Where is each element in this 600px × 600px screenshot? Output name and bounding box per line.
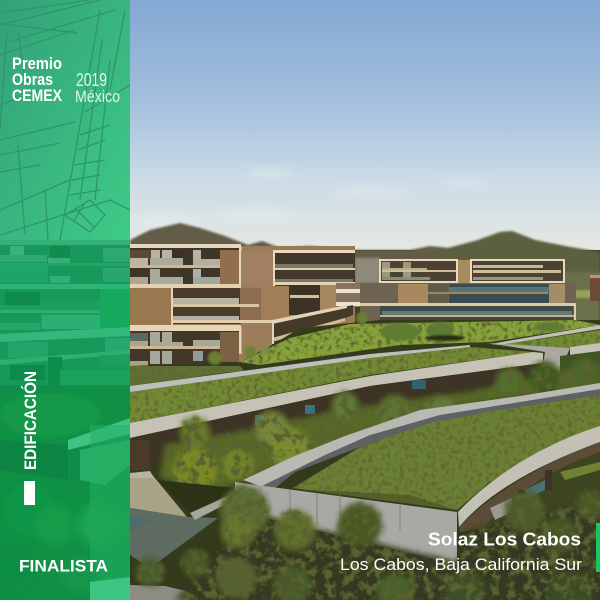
mountains: [130, 223, 600, 290]
project name: Solaz Los Cabos: [428, 530, 581, 550]
terrace shadow rooms: [130, 363, 543, 470]
foreground roof: green garden: [293, 395, 600, 510]
terrace rail: [130, 345, 470, 392]
foreground roof: stepped solar rail: [243, 383, 600, 488]
lower left wall and pavement: [130, 471, 235, 600]
year and country: [75, 70, 120, 106]
project location: Los Cabos, Baja California Sur: [340, 555, 582, 574]
panel sketch lines: [0, 0, 130, 240]
category marker: [24, 481, 35, 505]
mid floors: [360, 284, 576, 321]
upper floors: [130, 244, 242, 288]
dark vegetation base: [130, 320, 600, 600]
right back terrace: [490, 325, 600, 345]
panel heading: Premio Obras CEMEX: [12, 55, 62, 105]
category label: EDIFICACIÓN: [21, 371, 40, 470]
upper box right: [458, 259, 565, 283]
building: right block: [360, 259, 576, 321]
panel heading: Premio Obras CEMEX: Premio: [12, 55, 62, 73]
back rooftop garden: [130, 312, 600, 386]
finalist label: FINALISTA: [19, 558, 108, 576]
foreground trees: [136, 486, 600, 600]
lower floors: [130, 325, 242, 368]
year and country: México: [75, 87, 120, 106]
building: left block: [130, 244, 386, 371]
wing: [272, 250, 386, 345]
foreground roof: concrete wall: [235, 482, 457, 565]
green panel: [0, 0, 130, 600]
panel photo zone: trees and roof: [0, 385, 130, 600]
brick volumes: [130, 251, 289, 354]
accent bar: [596, 523, 600, 572]
upper box left: [379, 259, 458, 283]
panel photo zone: building: [0, 240, 130, 400]
rooftop garden: middle terrace: [130, 325, 600, 470]
sky: [125, 0, 600, 250]
middle floors: [171, 288, 289, 325]
year and country: 2019: [76, 70, 107, 90]
terrace fascia: [130, 352, 543, 438]
panel heading: Premio Obras CEMEX: Obras: [12, 71, 53, 89]
foreground roof: curved fascia: [458, 426, 600, 540]
town right of the buildings: [565, 272, 600, 322]
panel heading: Premio Obras CEMEX: CEMEX: [12, 87, 62, 105]
trees between terraces: [160, 358, 600, 492]
